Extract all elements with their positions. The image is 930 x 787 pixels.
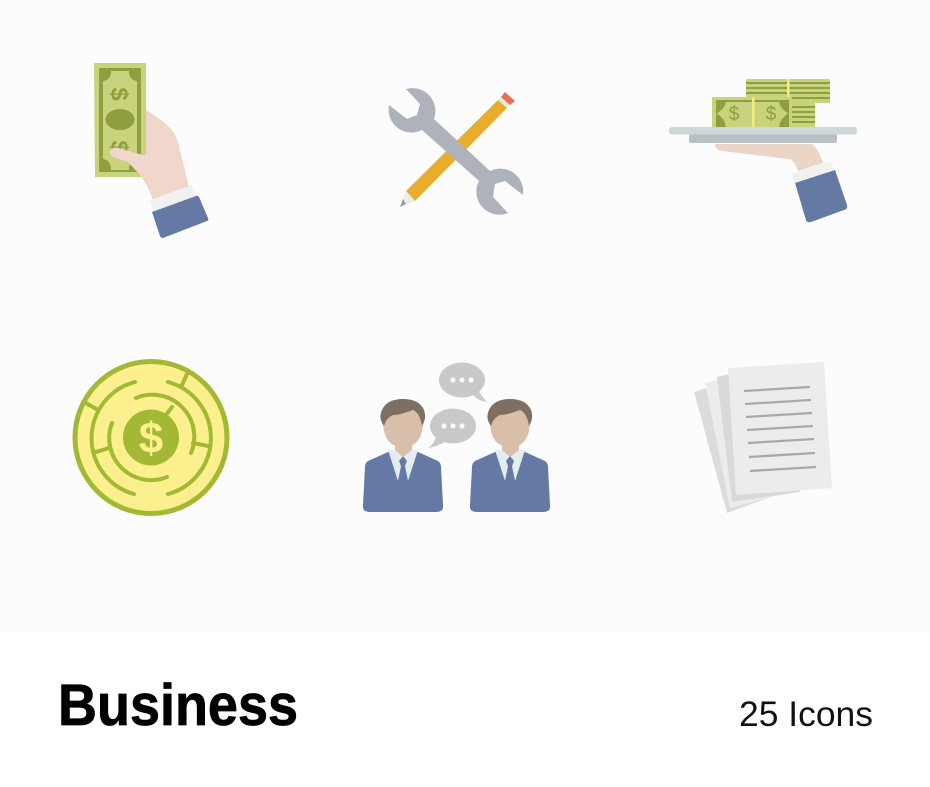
- icon: hand holding tray of money: [669, 79, 857, 222]
- icon: money maze coin: [75, 362, 227, 514]
- title: Business: [58, 673, 298, 738]
- icon: hand holding tray of money: $: [729, 104, 740, 125]
- icon: stack of paper documents: [694, 362, 832, 513]
- icon: hand holding banknote: [94, 63, 208, 238]
- icon: money maze coin: $: [139, 414, 163, 463]
- speech bubble bottom: [428, 408, 476, 448]
- speech bubble top: [439, 362, 487, 402]
- person right: [470, 399, 550, 512]
- icon: hand holding banknote: $: [105, 140, 132, 154]
- icon count label: 25 Icons: [739, 695, 873, 734]
- icon: two businessmen talking: [363, 362, 550, 512]
- person left: [363, 399, 443, 512]
- icon: crossed wrench and pencil: [389, 88, 523, 215]
- icon: hand holding tray of money: $: [766, 104, 777, 125]
- icon: hand holding banknote: $: [105, 87, 132, 101]
